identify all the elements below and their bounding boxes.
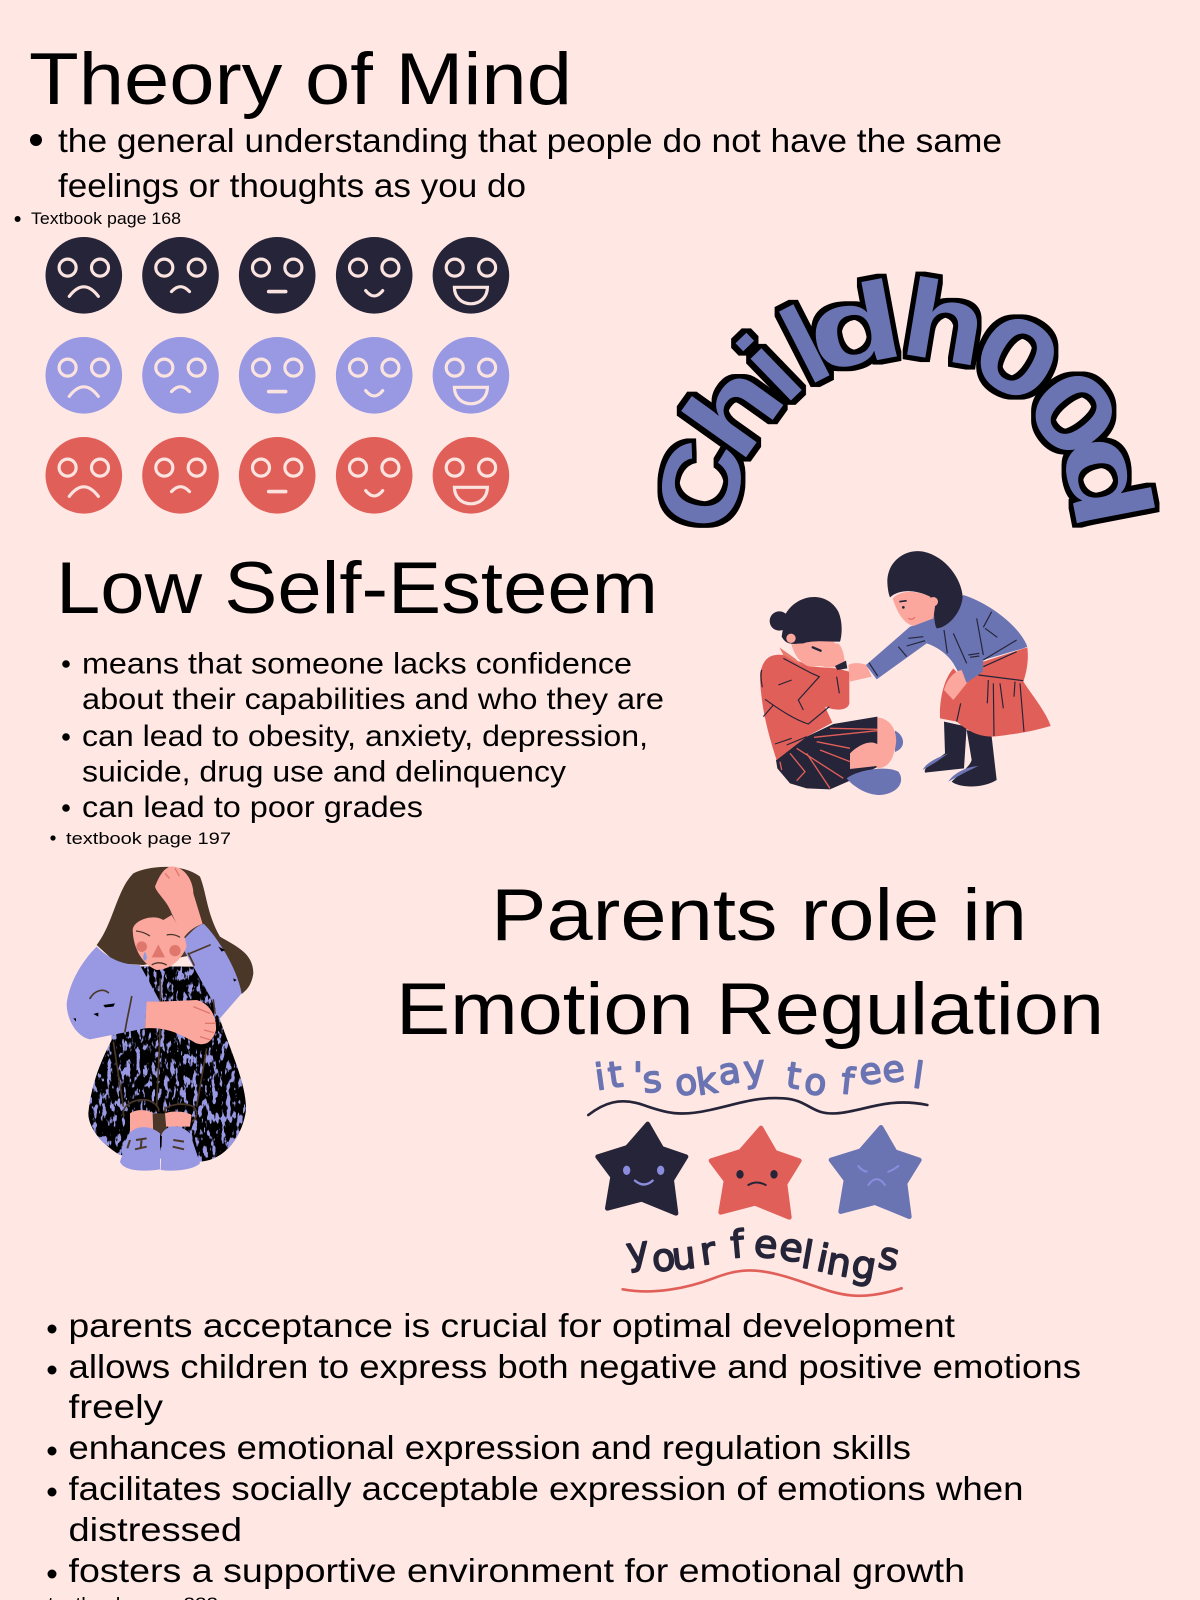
handwritten text: your feelings: your feelings bbox=[623, 1221, 903, 1289]
text block: low self-esteem bullets: can lead to poor grades bbox=[82, 791, 423, 824]
icon grid: emotion faces bbox=[46, 237, 509, 514]
heading: Childhood arc: C bbox=[633, 430, 770, 540]
text block: parents role bullets: parents acceptance is crucial for optimal development bbox=[68, 1307, 955, 1344]
text block: low self-esteem bullets: can lead to obesity, anxiety, depression, bbox=[82, 720, 648, 753]
sticker: it's okay to feel your feelings bbox=[588, 1048, 927, 1296]
text block: parents role bullets bbox=[48, 1307, 1081, 1589]
text block: parents role bullets: distressed bbox=[68, 1511, 242, 1548]
handwritten text: it's okay to feel: it's okay to feel bbox=[592, 1048, 926, 1105]
illustration: sad girl hugging knees bbox=[67, 867, 253, 1171]
row: lavender faces bbox=[46, 337, 509, 414]
citation: textbook page 197: textbook page 197 bbox=[66, 829, 231, 848]
row: dark faces bbox=[46, 237, 509, 314]
text block: theory of mind definition: feelings or thoughts as you do bbox=[58, 167, 526, 204]
text block: parents role bullets: fosters a supportive environment for emotional growth bbox=[68, 1552, 965, 1589]
heading: Childhood arc: h bbox=[894, 255, 995, 389]
heading: Childhood arc: d bbox=[1037, 423, 1176, 538]
heading: Childhood arc bbox=[633, 255, 1176, 540]
heading: Childhood arc: l bbox=[763, 284, 848, 408]
decorative wave: red bbox=[623, 1270, 902, 1296]
heading: Childhood arc: h bbox=[660, 340, 807, 478]
text block: low self-esteem bullets: suicide, drug use and delinquency bbox=[82, 756, 566, 789]
heading: Childhood arc: i bbox=[717, 313, 824, 423]
row: red faces bbox=[46, 437, 509, 514]
icon: smiling navy star bbox=[598, 1124, 686, 1213]
heading: Childhood arc: o bbox=[997, 328, 1167, 485]
heading: Low Self-Esteem: Low Self-Esteem bbox=[56, 548, 658, 629]
text block: parents role bullets: allows children to express both negative and positive emotions bbox=[68, 1348, 1081, 1385]
text block: low self-esteem bullets: about their capabilities and who they are bbox=[82, 683, 664, 716]
text block: theory of mind definition: the general understanding that people do not have the same bbox=[58, 122, 1002, 159]
heading: Parents role in Emotion Regulation bbox=[396, 875, 1104, 1050]
text block: parents role bullets: facilitates socially acceptable expression of emotions when bbox=[68, 1470, 1024, 1507]
text block: low self-esteem bullets: means that someone lacks confidence bbox=[82, 648, 632, 680]
decorative wave: navy bbox=[588, 1098, 927, 1115]
illustration: girl comforting crying friend bbox=[760, 551, 1051, 795]
heading: Parents role in Emotion Regulation: Parents role in bbox=[491, 875, 1027, 956]
text block: theory of mind definition bbox=[30, 122, 1002, 204]
icon: sad red star bbox=[711, 1128, 799, 1217]
citation: textbook page 168: Textbook page 168 bbox=[31, 209, 181, 228]
icon: angry blue star bbox=[831, 1127, 919, 1217]
title: Theory of Mind: Theory of Mind bbox=[29, 39, 572, 120]
heading: Childhood arc: d bbox=[798, 257, 911, 395]
text block: parents role bullets: freely bbox=[68, 1388, 164, 1425]
heading: Parents role in Emotion Regulation: Emotion Regulation bbox=[396, 969, 1104, 1050]
text block: parents role bullets: enhances emotional expression and regulation skills bbox=[68, 1429, 911, 1466]
heading: Childhood arc: o bbox=[950, 261, 1095, 434]
text block: low self-esteem bullets bbox=[62, 648, 664, 824]
